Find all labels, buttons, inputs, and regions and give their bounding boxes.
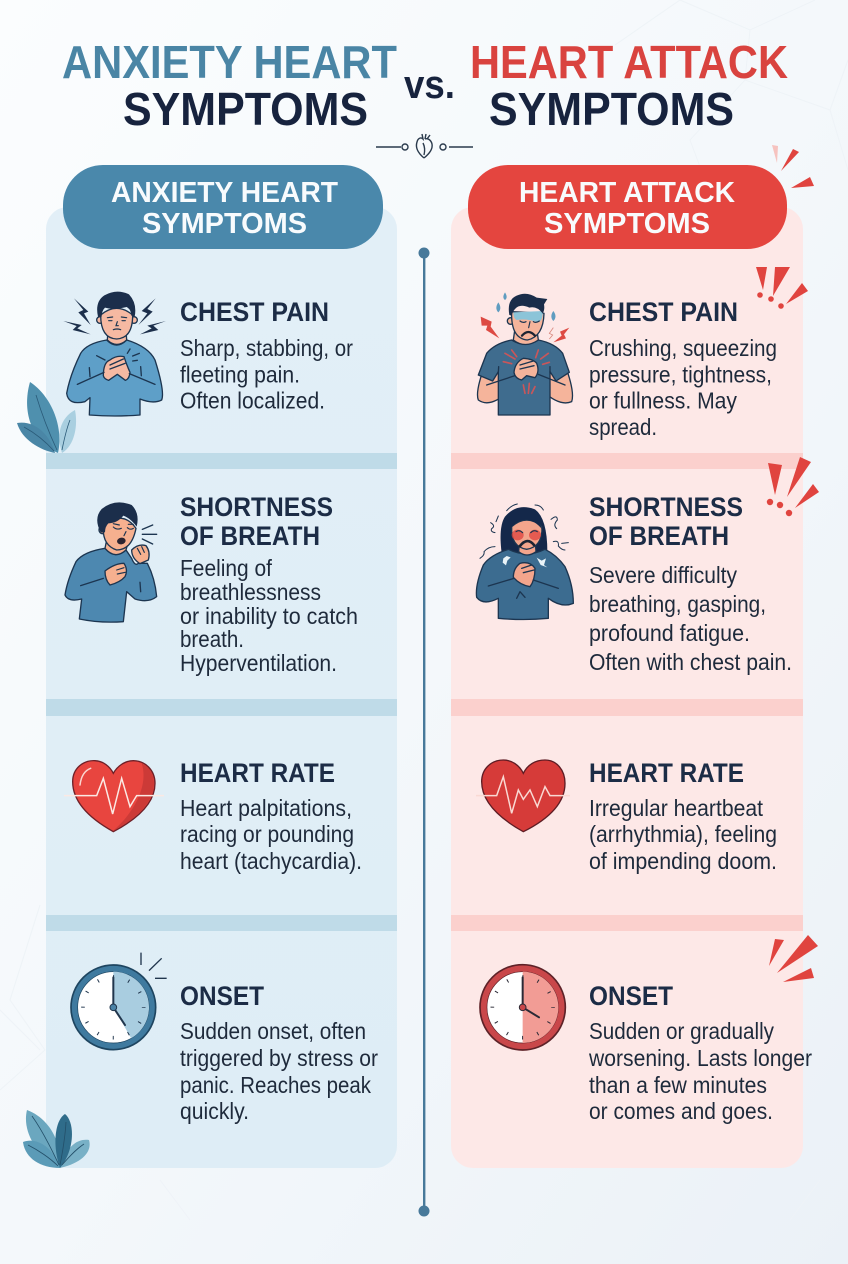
title: heart attack symptoms: HEART ATTACK: [470, 36, 788, 88]
description: or comes and goes.: [589, 1098, 773, 1124]
title: heart attack symptoms: SYMPTOMS: [489, 83, 734, 135]
description: breath.: [180, 626, 244, 652]
panel: anxiety column: [46, 207, 397, 1168]
header pill: anxiety: [63, 165, 383, 249]
row: anxiety chest pain: [63, 292, 353, 416]
heading: SHORTNESS: [180, 492, 333, 522]
icon: woman in distress: [476, 504, 573, 619]
description: of impending doom.: [589, 848, 777, 874]
title: anxiety heart symptoms: SYMPTOMS: [123, 83, 368, 135]
vs label: vs.: [404, 63, 455, 107]
description: Heart palpitations,: [180, 795, 352, 821]
title: anxiety heart symptoms: ANXIETY HEART: [62, 36, 397, 88]
description: [180, 335, 353, 414]
description: than a few minutes: [589, 1072, 767, 1098]
heading: ONSET: [180, 981, 264, 1011]
description: (arrhythmia), feeling: [589, 821, 777, 847]
header pill: anxiety: ANXIETY HEART: [111, 177, 338, 209]
description: triggered by stress or: [180, 1045, 378, 1071]
icon: alert rays: [769, 935, 818, 982]
description: Crushing, squeezing: [589, 335, 777, 361]
description: fleeting pain.: [180, 362, 300, 388]
header pill: heart attack: HEART ATTACK: [519, 177, 735, 209]
title: heart attack symptoms: [470, 36, 788, 135]
icon: leaves top left: [17, 382, 76, 453]
description: breathing, gasping,: [589, 591, 766, 617]
row: anxiety shortness of breath: [65, 492, 358, 676]
header pill: heart attack: [468, 165, 787, 249]
description: Sudden or gradually: [589, 1018, 774, 1044]
heading: CHEST PAIN: [180, 297, 329, 327]
description: quickly.: [180, 1098, 249, 1124]
heading: OF BREATH: [589, 521, 729, 551]
heading: CHEST PAIN: [589, 297, 738, 327]
heading: HEART RATE: [180, 758, 335, 788]
description: breathlessness: [180, 579, 321, 605]
description: Sharp, stabbing, or: [180, 335, 353, 361]
row: anxiety onset: [71, 953, 378, 1124]
icon: alert marks: [756, 267, 808, 309]
heading: [180, 492, 333, 551]
title: anxiety heart symptoms: [62, 36, 397, 135]
description: profound fatigue.: [589, 620, 750, 646]
icon: man in distress: [477, 292, 572, 415]
description: spread.: [589, 414, 657, 440]
description: worsening. Lasts longer: [588, 1045, 812, 1071]
icon: heart with irregular ecg: [476, 760, 570, 832]
description: [589, 335, 777, 440]
icon: heart with ecg: [64, 761, 164, 832]
heading: ONSET: [589, 981, 673, 1011]
description: or inability to catch: [180, 603, 358, 629]
description: [589, 562, 792, 675]
icon: man coughing: [65, 502, 157, 622]
heading: OF BREATH: [180, 521, 320, 551]
row: heart attack chest pain: [477, 267, 808, 440]
description: [180, 795, 362, 874]
heading: [589, 492, 743, 551]
description: pressure, tightness,: [589, 362, 772, 388]
icon: alert marks: [767, 457, 819, 516]
row: heart attack heart rate: [476, 758, 777, 874]
description: Severe difficulty: [589, 562, 737, 588]
row: anxiety heart rate: [64, 758, 362, 874]
panel: heart attack column: [451, 207, 803, 1168]
heading: SHORTNESS: [589, 492, 743, 522]
icon: man with chest pain: [63, 292, 166, 416]
header pill: heart attack: SYMPTOMS: [544, 208, 710, 240]
description: panic. Reaches peak: [180, 1072, 371, 1098]
description: heart (tachycardia).: [180, 848, 362, 874]
icon: leaves bottom left: [23, 1110, 90, 1168]
heading: HEART RATE: [589, 758, 744, 788]
description: Often with chest pain.: [589, 649, 792, 675]
center timeline divider: [418, 248, 430, 1216]
description: Often localized.: [180, 388, 325, 414]
description: Feeling of: [180, 555, 273, 581]
description: [589, 795, 777, 874]
row: heart attack onset: [480, 935, 818, 1124]
divider with anatomical heart icon: [376, 134, 473, 158]
description: racing or pounding: [180, 821, 354, 847]
icon: clock: [71, 953, 167, 1050]
icon: alert rays on pill: [772, 145, 814, 188]
description: Hyperventilation.: [180, 650, 337, 676]
description: or fullness. May: [589, 388, 737, 414]
description: [180, 555, 358, 676]
icon: clock: [480, 965, 565, 1050]
description: [588, 1018, 812, 1124]
description: Irregular heartbeat: [589, 795, 764, 821]
row: heart attack shortness of breath: [476, 457, 819, 675]
description: [180, 1018, 378, 1124]
description: Sudden onset, often: [180, 1018, 366, 1044]
header pill: anxiety: SYMPTOMS: [142, 208, 307, 240]
